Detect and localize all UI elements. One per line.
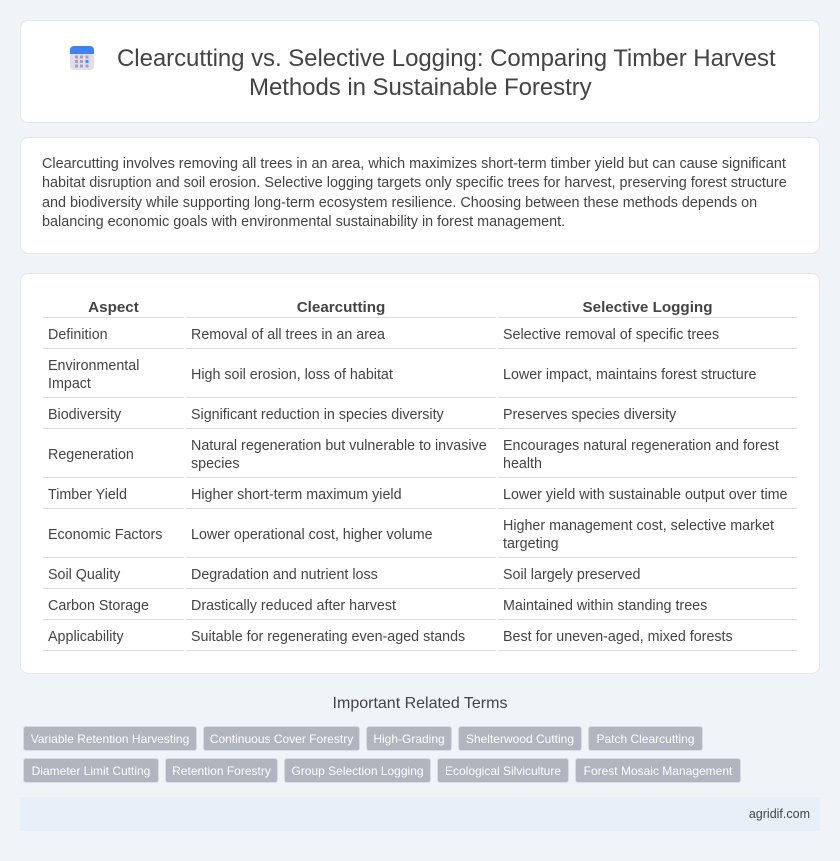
- tag: Continuous Cover Forestry: [210, 732, 353, 746]
- comparison table: Timber Yield: [48, 487, 127, 503]
- intro paragraph: balancing economic goals with environmental sustainability in forest management.: [42, 214, 565, 230]
- comparison table: Aspect: [88, 299, 139, 316]
- header panel: [20, 20, 820, 123]
- tag: Retention Forestry: [172, 764, 271, 778]
- comparison table: Lower operational cost, higher volume: [191, 527, 433, 543]
- tag: [437, 758, 569, 783]
- tag: Group Selection Logging: [291, 764, 424, 778]
- comparison table: Biodiversity: [48, 407, 121, 423]
- tag: [23, 726, 197, 751]
- tag: Diameter Limit Cutting: [32, 764, 150, 778]
- comparison table: Regeneration: [48, 447, 134, 463]
- comparison table: Soil largely preserved: [503, 567, 640, 583]
- comparison table: Best for uneven-aged, mixed forests: [503, 629, 733, 645]
- intro paragraph: and biodiversity while supporting long-term ecosystem resilience. Choosing between these methods depends on: [42, 195, 757, 211]
- tag: Variable Retention Harvesting: [31, 732, 189, 746]
- comparison table: Higher management cost, selective market targeting: [503, 518, 774, 552]
- comparison table: Removal of all trees in an area: [191, 327, 385, 343]
- comparison table: Lower yield with sustainable output over time: [503, 487, 788, 503]
- intro paragraph: habitat disruption and soil erosion. Selective logging targets only specific trees for harvest, preserving forest structure: [42, 175, 787, 191]
- tag: [23, 758, 159, 783]
- related terms row 2: [23, 758, 741, 783]
- comparison table: Selective Logging: [583, 299, 712, 316]
- comparison table: Applicability: [48, 629, 124, 645]
- tag: Patch Clearcutting: [596, 732, 695, 746]
- tag: Ecological Silviculture: [445, 764, 561, 778]
- comparison table: Selective removal of specific trees: [503, 327, 719, 343]
- comparison table: Environmental Impact: [48, 358, 139, 392]
- footer site name: agridif.com: [749, 807, 810, 821]
- tag: [588, 726, 703, 751]
- tag: [575, 758, 741, 783]
- comparison table: Carbon Storage: [48, 598, 149, 614]
- intro paragraph: [42, 156, 787, 230]
- comparison table: Maintained within standing trees: [503, 598, 707, 614]
- tag: High-Grading: [373, 732, 445, 746]
- related terms heading: Important Related Terms: [333, 695, 507, 712]
- comparison table panel: [20, 273, 820, 674]
- comparison table: Definition: [48, 327, 108, 343]
- tag: Forest Mosaic Management: [584, 764, 732, 778]
- intro paragraph: Clearcutting involves removing all trees in an area, which maximizes short-term timber yield but can cause significant: [42, 156, 786, 172]
- tag: Shelterwood Cutting: [466, 732, 574, 746]
- comparison table: Degradation and nutrient loss: [191, 567, 378, 583]
- comparison table: Clearcutting: [297, 299, 385, 316]
- comparison table: Soil Quality: [48, 567, 120, 583]
- comparison table: Natural regeneration but vulnerable to invasive species: [191, 438, 487, 472]
- icon: calendar: [70, 46, 94, 70]
- tag: [284, 758, 431, 783]
- comparison table: Significant reduction in species diversity: [191, 407, 444, 423]
- tag: [165, 758, 278, 783]
- intro text panel: [20, 137, 820, 254]
- tag: [458, 726, 582, 751]
- comparison table: Preserves species diversity: [503, 407, 676, 423]
- comparison table: High soil erosion, loss of habitat: [191, 367, 393, 383]
- title: Clearcutting vs. Selective Logging: Comparing Timber Harvest: [117, 45, 776, 72]
- related terms row 1: [23, 726, 703, 751]
- comparison table: Drastically reduced after harvest: [191, 598, 396, 614]
- comparison table: Suitable for regenerating even-aged stands: [191, 629, 465, 645]
- title: Methods in Sustainable Forestry: [249, 74, 592, 101]
- tag: [203, 726, 360, 751]
- comparison table: Economic Factors: [48, 527, 162, 543]
- comparison table: Encourages natural regeneration and forest health: [503, 438, 779, 472]
- title: [117, 45, 776, 101]
- comparison table: Lower impact, maintains forest structure: [503, 367, 756, 383]
- footer bar: [20, 797, 820, 831]
- tag: [366, 726, 452, 751]
- comparison table: Higher short-term maximum yield: [191, 487, 402, 503]
- comparison table: [43, 299, 797, 651]
